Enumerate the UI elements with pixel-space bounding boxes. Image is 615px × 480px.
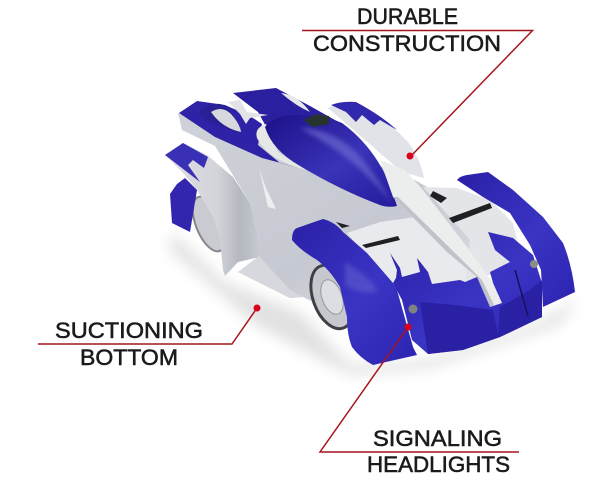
roof sensor: [304, 114, 329, 127]
label line 2: CONSTRUCTION: [313, 31, 501, 56]
rear wheel: [186, 192, 232, 256]
canopy: [265, 115, 397, 207]
rear scoop: [199, 104, 241, 133]
canopy highlight: [300, 128, 392, 204]
marker dot: [404, 324, 412, 330]
rear blue guard: [170, 178, 197, 232]
rear fender blue tip: [165, 143, 208, 182]
fender highlight: [345, 262, 378, 293]
rear fin blue top: [331, 102, 397, 130]
rear top wing: [233, 88, 342, 130]
rear fender skirt: [238, 256, 303, 298]
strip shading: [393, 197, 494, 307]
callout: suctioning bottom: [38, 304, 260, 370]
white deck panel: [228, 100, 268, 124]
front centre blue: [390, 232, 542, 354]
marker dot: [406, 152, 414, 160]
white front deck left: [347, 215, 480, 288]
leader line: [38, 308, 257, 344]
leader line: [302, 30, 532, 156]
headlights: [408, 260, 538, 314]
canopy white rim: [256, 124, 306, 170]
crease: [259, 168, 276, 209]
front wheel: [303, 259, 361, 335]
label line 2: BOTTOM: [80, 345, 178, 370]
label line 1: SIGNALING: [373, 426, 502, 451]
nose dark panel: [420, 280, 542, 354]
label line 1: SUCTIONING: [55, 318, 203, 343]
center white strip: [380, 160, 502, 307]
rear fin right: [328, 102, 424, 178]
left front fender: [292, 219, 417, 365]
marker dot: [254, 304, 260, 312]
callout: durable construction: [302, 4, 532, 160]
leader line: [320, 327, 519, 452]
rear deck blue: [179, 101, 307, 170]
vents: [336, 191, 492, 248]
callout: signaling headlights: [320, 324, 519, 477]
nose grille line: [515, 270, 528, 316]
silver main body: [178, 113, 500, 302]
label line 2: HEADLIGHTS: [367, 452, 510, 477]
wheel hub: [316, 277, 348, 317]
white front deck right: [423, 187, 517, 282]
ground shadow: [170, 232, 578, 375]
car illustration: [165, 88, 578, 375]
right front fender: [457, 172, 575, 307]
rear fender silver: [165, 143, 260, 276]
white wing flash: [281, 93, 310, 112]
label line 1: DURABLE: [357, 4, 458, 29]
